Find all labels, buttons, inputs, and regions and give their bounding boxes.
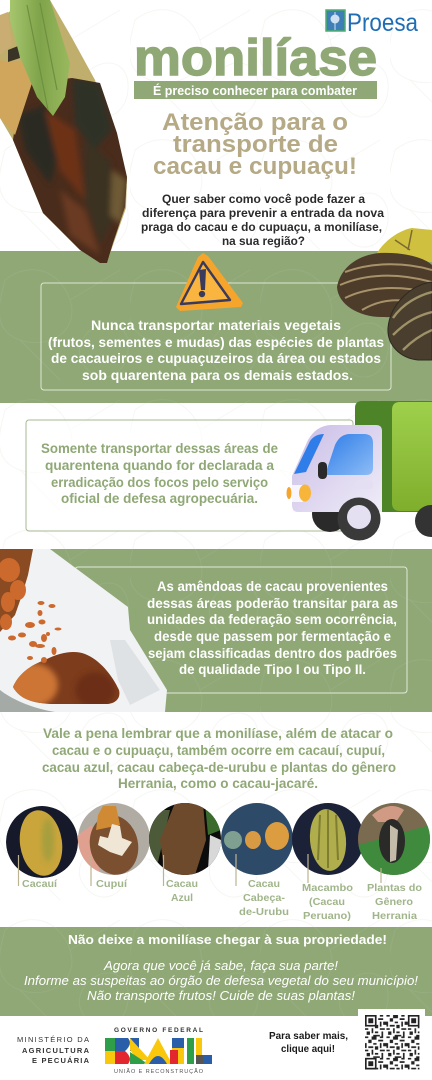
heading: attention <box>153 109 357 180</box>
species labels: Macambo <box>302 882 353 894</box>
almonds text box: desde que passem por fermentação e <box>154 629 391 644</box>
logo: Ministério da Agricultura e Pecuária: E PECUÁRIA <box>32 1056 90 1065</box>
panel: warning band <box>0 251 432 403</box>
icon: truck <box>286 401 432 540</box>
logo: Governo Federal Brasil: UNIÃO E RECONSTRUÇÃO <box>114 1068 204 1075</box>
leader lines <box>18 854 381 886</box>
panel: call to action band <box>0 927 432 1016</box>
species labels <box>22 878 422 922</box>
QR code <box>358 1009 425 1080</box>
heading: attention: Atenção para o <box>162 109 348 136</box>
logo: Ministério da Agricultura e Pecuária: AGRICULTURA <box>22 1046 90 1055</box>
almonds text box: As amêndoas de cacau provenientes <box>157 579 388 594</box>
image: diseased cacao pod <box>0 0 135 270</box>
photo: cacau azul <box>149 803 221 875</box>
QR call text <box>269 1030 348 1055</box>
intro text: diferença para prevenir a entrada da nova <box>142 208 385 220</box>
subtitle banner <box>134 81 377 99</box>
logo: Proesa: Proesa <box>347 9 418 37</box>
logo: Governo Federal Brasil: GOVERNO FEDERAL <box>114 1027 203 1034</box>
species labels: Cupuí <box>96 878 128 890</box>
species labels: (Cacau <box>309 896 345 908</box>
intro text: na sua região? <box>222 236 305 248</box>
species labels: Herrania <box>372 910 417 922</box>
image: bag of cacao almonds <box>0 549 167 712</box>
truck text box: oficial de defesa agropecuária. <box>61 491 258 506</box>
image: cacao pods top right <box>337 228 432 360</box>
species labels: Plantas do <box>367 882 422 894</box>
almonds text box: de qualidade Tipo I ou Tipo II. <box>179 662 366 677</box>
heading: attention: transporte de <box>173 131 338 158</box>
QR call text: Para saber mais, <box>269 1030 348 1042</box>
species labels: Cacauí <box>22 878 58 890</box>
species labels: Azul <box>171 892 193 904</box>
species labels: Cabeça- <box>243 892 286 904</box>
QR call text: clique aqui! <box>281 1043 335 1055</box>
truck text box <box>26 420 353 531</box>
warning text box: Nunca transportar materiais vegetais <box>91 318 341 333</box>
text: other hosts: cacau e o cupuaçu, também ocorre em cacauí, cupuí, <box>52 743 385 758</box>
call to action text: Informe as suspeitas ao órgão de defesa vegetal do seu município! <box>24 973 418 988</box>
intro text: praga do cacau e do cupuaçu, a monilíase, <box>141 222 382 234</box>
species labels: Cacau <box>166 878 198 890</box>
call to action text: Agora que você já sabe, faça sua parte! <box>103 958 338 973</box>
text: other hosts: cacau azul, cacau cabeça-de-urubu e plantas do gênero <box>42 760 396 775</box>
intro text <box>141 194 385 248</box>
panel: almonds band <box>0 549 432 712</box>
almonds text box: dessas áreas poderão transitar para as <box>147 596 398 611</box>
warning text box: sob quarentena para os demais estados. <box>82 368 353 383</box>
call to action text <box>24 958 418 1003</box>
text: other hosts: Herrania, como o cacau-jacaré. <box>118 776 318 791</box>
photo: cupuí <box>78 803 150 879</box>
almonds text box <box>75 567 407 693</box>
warning text box: de cacaueiros e cupuaçuzeiros da área ou estados <box>51 351 381 366</box>
heading: attention: cacau e cupuaçu! <box>153 153 357 180</box>
call to action text: Não transporte frutos! Cuide de suas plantas! <box>87 988 355 1003</box>
almonds text box: sejam classificadas dentro dos padrões <box>148 646 397 661</box>
icon: warning triangle <box>176 253 243 311</box>
photo: cacauí <box>6 806 78 879</box>
warning text box: (frutos, sementes e mudas) das espécies de plantas <box>48 335 384 350</box>
text: other hosts: Vale a pena lembrar que a monilíase, além de atacar o <box>43 726 393 741</box>
text: other hosts <box>42 726 396 791</box>
species labels: Peruano) <box>303 910 351 922</box>
species labels: de-Urubu <box>239 906 289 918</box>
title: monilíase <box>134 29 377 86</box>
intro text: Quer saber como você pode fazer a <box>162 194 366 206</box>
truck text box: Somente transportar dessas áreas de <box>41 441 278 456</box>
species labels: Cacau <box>248 878 280 890</box>
almonds text box: unidades da federação sem ocorrência, <box>147 612 397 627</box>
logo: Ministério da Agricultura e Pecuária: MINISTÉRIO DA <box>17 1035 89 1044</box>
subtitle banner: É preciso conhecer para combater <box>153 83 357 98</box>
truck text box: erradicação dos focos pelo serviço <box>51 475 268 490</box>
photo: cacau cabeça-de-urubu <box>221 803 293 875</box>
call to action heading: Não deixe a monilíase chegar à sua propriedade! <box>68 932 387 947</box>
truck text box: quarentena quando for declarada a <box>45 458 274 473</box>
photo: plantas do gênero Herrania <box>358 803 430 875</box>
photo: macambo <box>292 803 364 875</box>
logo: Governo Federal Brasil <box>105 1027 212 1075</box>
logo: Ministério da Agricultura e Pecuária <box>17 1035 90 1065</box>
warning text box <box>41 283 391 390</box>
species labels: Gênero <box>375 896 413 908</box>
